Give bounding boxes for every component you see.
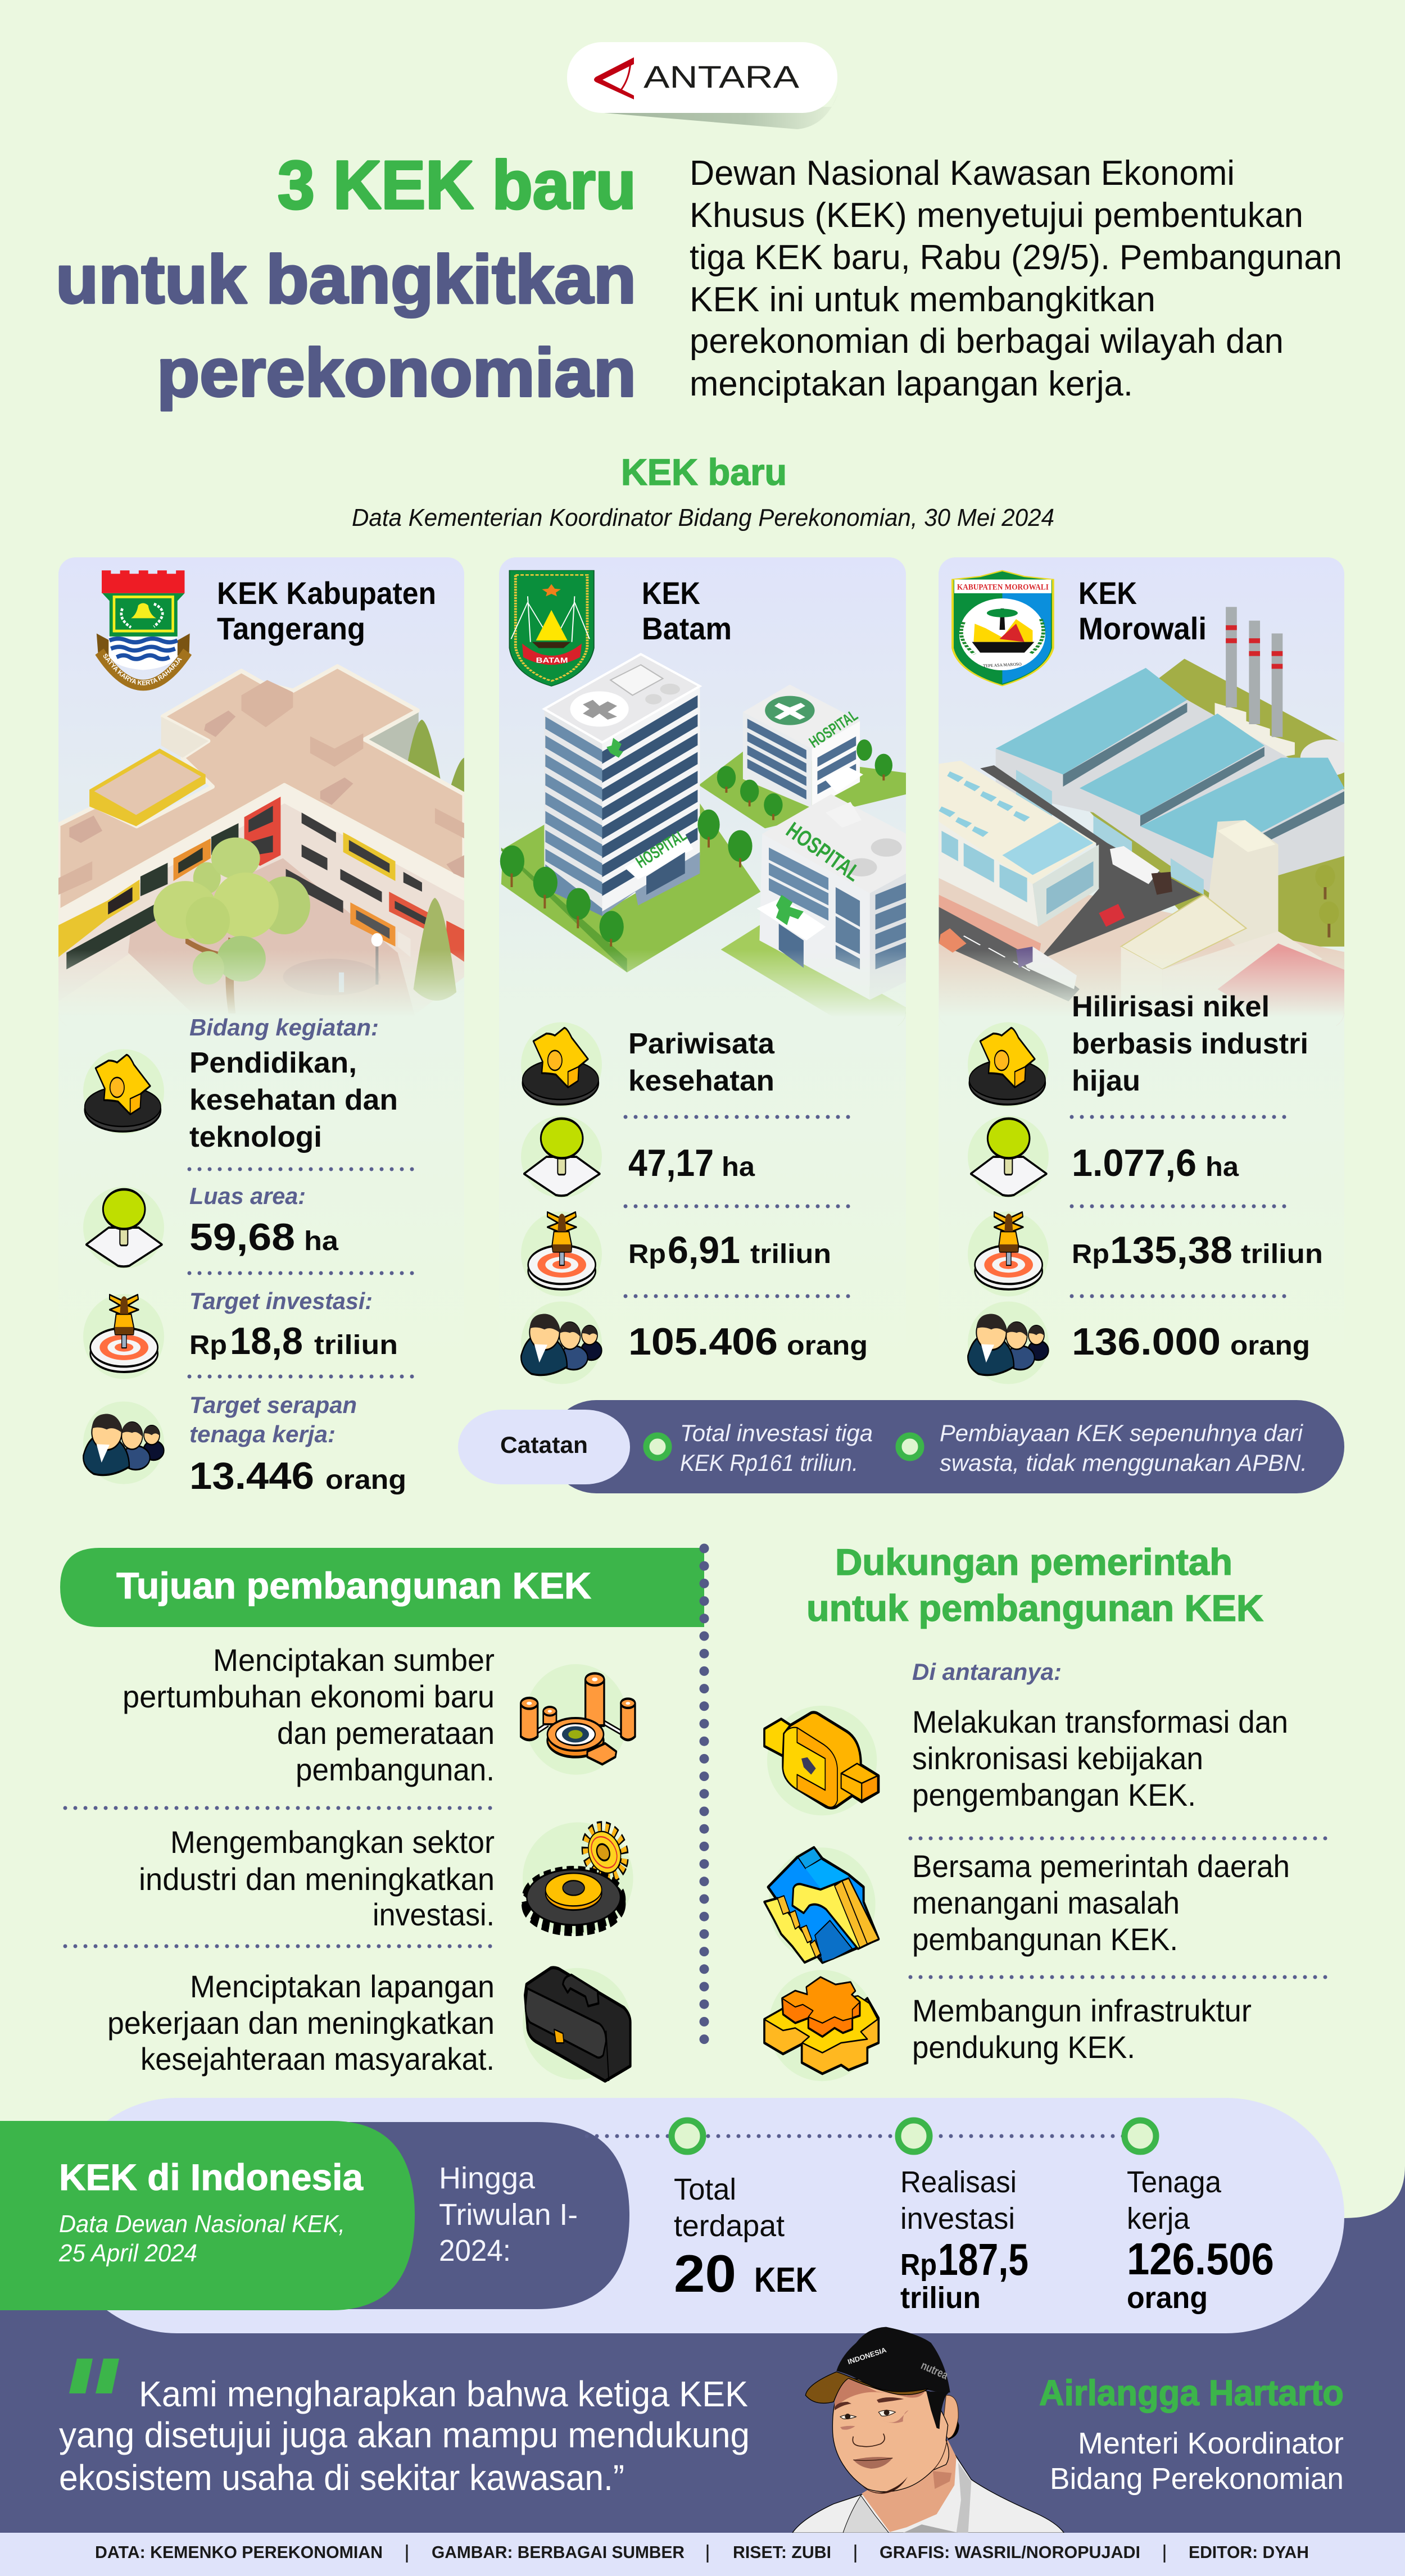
icon: bidang kegiatan	[521, 1022, 602, 1107]
label: di antaranya: Di antaranya:	[912, 1659, 1062, 1685]
text: luas area: ha	[722, 1152, 755, 1182]
quote	[59, 2359, 750, 2498]
marker and stat: realisasi investasi	[898, 2120, 1028, 2315]
icon: luas area	[83, 1187, 164, 1269]
intro text: KEK ini untuk membangkitkan	[690, 280, 1155, 319]
text: target investasi: Rp	[1072, 1239, 1109, 1269]
quote attribution: Menteri Koordinator	[1078, 2427, 1344, 2460]
panel: KEK Kabupaten Tangerang	[58, 557, 464, 1497]
text: target investasi: triliun	[314, 1330, 398, 1360]
text: tujuan 2	[139, 1824, 495, 1932]
icon: target investasi	[83, 1294, 164, 1379]
text: target serapan tenaga kerja: tenaga kerja:	[189, 1421, 336, 1447]
callout: catatan	[458, 1400, 1344, 1493]
marker and stat: tenaga kerja: 126.506	[1127, 2234, 1274, 2284]
icon: luas area	[521, 1116, 602, 1198]
text: tujuan 2: investasi.	[373, 1897, 495, 1932]
label: hingga triwulan: Hingga	[439, 2161, 536, 2195]
panel: KEK Morowali	[939, 557, 1356, 1400]
marker and stat: realisasi investasi: triliun	[900, 2281, 981, 2315]
logo: Kabupaten Tangerang: SATYA KARYA KERTA RAHARJA	[103, 654, 182, 685]
text: tenaga kerja: orang	[787, 1331, 868, 1361]
footer credits	[0, 2533, 1405, 2576]
marker and stat: total KEK: Total	[674, 2173, 736, 2206]
text: dukungan 2: Bersama pemerintah daerah	[912, 1848, 1290, 1884]
title: perekonomian	[157, 334, 636, 411]
text: luas area	[189, 1183, 338, 1259]
text: tujuan 1: pertumbuhan ekonomi baru	[123, 1679, 495, 1714]
quote attribution: Bidang Perekonomian	[1050, 2462, 1344, 2496]
callout: catatan: Catatan	[500, 1432, 588, 1458]
heading: KEK di Indonesia: 25 April 2024	[58, 2239, 197, 2267]
text: tujuan 3: kesejahteraan masyarakat.	[140, 2041, 495, 2077]
text: target serapan tenaga kerja	[189, 1392, 406, 1497]
footer credits: RISET: ZUBI	[733, 2542, 831, 2562]
quote: Kami mengharapkan bahwa ketiga KEK	[139, 2374, 748, 2414]
text: bidang kegiatan: Pariwisata	[628, 1028, 775, 1060]
heading: dukungan	[806, 1541, 1263, 1629]
heading: Tangerang	[217, 611, 365, 646]
marker and stat: tenaga kerja: kerja	[1127, 2202, 1190, 2236]
logo: Kota Batam: BATAM	[536, 657, 568, 665]
text: tujuan 1: pembangunan.	[296, 1752, 495, 1787]
text: bidang kegiatan: kesehatan dan	[189, 1084, 398, 1116]
icon: luas area	[968, 1116, 1049, 1198]
text: tenaga kerja: 136.000	[1072, 1320, 1221, 1363]
text: luas area: 59,68	[189, 1216, 295, 1259]
text: tujuan 2: Mengembangkan sektor	[170, 1824, 495, 1860]
icon: tenaga kerja	[521, 1301, 602, 1384]
text: luas area: ha	[1205, 1152, 1239, 1182]
heading: Batam	[642, 611, 732, 646]
text: tujuan 3	[107, 1969, 495, 2077]
label: hingga triwulan: Triwulan I-	[439, 2198, 578, 2232]
text: luas area: ha	[304, 1226, 338, 1256]
illustration: hospital	[499, 654, 907, 1029]
text: target serapan tenaga kerja: Target serapan	[189, 1392, 357, 1418]
text: bidang kegiatan	[628, 1028, 775, 1097]
icon: briefcase	[523, 1968, 631, 2081]
marker and stat: tenaga kerja: orang	[1127, 2281, 1208, 2315]
icon: bidang kegiatan	[968, 1022, 1049, 1107]
text: dukungan 1: sinkronisasi kebijakan	[912, 1741, 1203, 1776]
text: bidang kegiatan: berbasis industri	[1072, 1028, 1308, 1060]
icon: key block	[764, 1706, 878, 1815]
text: luas area: Luas area:	[189, 1183, 306, 1209]
text: tujuan 1	[123, 1642, 495, 1787]
illustration: school building	[58, 666, 464, 1029]
heading: tujuan	[60, 1548, 704, 1627]
intro text: Khusus (KEK) menyetujui pembentukan	[690, 196, 1303, 235]
panel: dukungan pemerintah	[764, 1541, 1335, 2081]
marker and stat: realisasi investasi: 187,5	[938, 2234, 1028, 2284]
marker and stat: total KEK: KEK	[754, 2261, 817, 2300]
text: dukungan 2: pembangunan KEK.	[912, 1921, 1178, 1957]
text: tenaga kerja	[1072, 1320, 1310, 1363]
logo: Kabupaten Tangerang	[96, 570, 192, 691]
icon: machine	[521, 1664, 635, 1775]
text: tujuan 1: Menciptakan sumber	[213, 1642, 495, 1678]
text: target investasi: triliun	[1241, 1239, 1323, 1269]
text: dukungan 1	[912, 1704, 1288, 1812]
marker and stat: realisasi investasi: Rp	[900, 2248, 937, 2282]
icon: bidang kegiatan	[83, 1049, 164, 1134]
label: hingga triwulan: 2024:	[439, 2234, 511, 2268]
heading	[217, 575, 436, 646]
heading: KEK Kabupaten	[217, 575, 436, 611]
section heading: KEK baru	[352, 451, 1054, 531]
text: target investasi: 18,8	[230, 1320, 303, 1362]
logo: Kabupaten Morowali: TEPE ASA MAROSO	[983, 662, 1022, 669]
illustration: hospital: HOSPITAL	[806, 706, 861, 751]
footer credits: EDITOR: DYAH	[1189, 2542, 1309, 2562]
callout: catatan: Pembiayaan KEK sepenuhnya dari	[940, 1420, 1304, 1446]
panel: KEK di Indonesia	[0, 2098, 1344, 2333]
icon: tenaga kerja	[83, 1401, 164, 1484]
panel: tujuan pembangunan KEK	[60, 1548, 704, 2081]
heading: KEK	[1078, 575, 1137, 611]
logo: ANTARA: ANTARA	[643, 59, 800, 94]
heading: tujuan: Tujuan pembangunan KEK	[116, 1565, 591, 1606]
heading: Morowali	[1078, 611, 1207, 646]
text: target serapan tenaga kerja: orang	[325, 1465, 406, 1495]
text: tenaga kerja	[628, 1320, 868, 1363]
heading: dukungan: untuk pembangunan KEK	[806, 1587, 1263, 1629]
text: target investasi	[628, 1229, 831, 1271]
text: target investasi: triliun	[750, 1239, 831, 1269]
text: target investasi: Target investasi:	[189, 1288, 373, 1314]
text: dukungan 2: menangani masalah	[912, 1885, 1180, 1920]
callout: catatan: Total investasi tiga	[680, 1420, 873, 1446]
heading	[1078, 575, 1207, 646]
icon: handshake	[764, 1847, 878, 1962]
text: target investasi	[189, 1288, 398, 1362]
text: dukungan 3: pendukung KEK.	[912, 2029, 1135, 2065]
text: tujuan 3: pekerjaan dan meningkatkan	[107, 2005, 495, 2041]
marker and stat: total KEK	[672, 2120, 817, 2303]
heading: KEK di Indonesia: KEK di Indonesia	[59, 2156, 364, 2198]
text: tujuan 1: dan pemerataan	[277, 1715, 495, 1751]
logo: Kabupaten Morowali	[953, 571, 1053, 685]
quote: ekosistem usaha di sekitar kawasan.”	[59, 2457, 624, 2498]
text: tenaga kerja: 105.406	[628, 1320, 778, 1363]
panel: KEK Batam	[499, 557, 907, 1400]
title	[56, 147, 636, 411]
text: dukungan 3	[912, 1993, 1252, 2065]
portrait: Airlangga Hartarto	[792, 2327, 1064, 2533]
callout: catatan: swasta, tidak menggunakan APBN.	[940, 1450, 1307, 1476]
illustration: hospital: HOSPITAL	[633, 826, 690, 872]
text: dukungan 2	[912, 1848, 1290, 1957]
text: target investasi: 6,91	[668, 1229, 740, 1271]
heading	[642, 575, 732, 646]
intro text: Dewan Nasional Kawasan Ekonomi	[690, 154, 1235, 193]
text: tujuan 2: industri dan meningkatkan	[139, 1861, 495, 1897]
text: dukungan 3: Membangun infrastruktur	[912, 1993, 1252, 2028]
marker and stat: realisasi investasi: Realisasi	[900, 2165, 1017, 2199]
text: luas area: 1.077,6	[1072, 1142, 1196, 1184]
marker and stat: realisasi investasi: investasi	[900, 2202, 1015, 2236]
intro text: menciptakan lapangan kerja.	[690, 365, 1133, 403]
icon: quote marks	[69, 2359, 119, 2393]
text: tenaga kerja: orang	[1230, 1331, 1310, 1361]
marker and stat: total KEK: 20	[674, 2244, 736, 2303]
logo: Kota Batam	[510, 570, 594, 686]
section heading: KEK baru: Data Kementerian Koordinator Bidang Perekonomian, 30 Mei 2024	[352, 504, 1054, 531]
text: tujuan 3: Menciptakan lapangan	[190, 1969, 495, 2004]
quote attribution: Airlangga Hartarto	[1039, 2373, 1344, 2413]
marker and stat: total KEK: terdapat	[674, 2209, 785, 2243]
marker and stat: tenaga kerja: Tenaga	[1127, 2165, 1222, 2199]
text: bidang kegiatan: hijau	[1072, 1065, 1140, 1097]
divider: dotted vertical	[699, 1548, 709, 2040]
callout: catatan: KEK Rp161 triliun.	[680, 1450, 858, 1476]
illustration: hospital: HOSPITAL	[782, 817, 865, 886]
heading: dukungan: Dukungan pemerintah	[835, 1541, 1232, 1583]
logo: ANTARA	[567, 42, 839, 129]
text: target investasi	[1072, 1229, 1323, 1271]
text: bidang kegiatan	[1072, 991, 1308, 1097]
label: hingga triwulan	[281, 2122, 629, 2309]
icon: tenaga kerja	[968, 1301, 1049, 1384]
title: 3 KEK baru	[278, 147, 636, 223]
quote: yang disetujui juga akan mampu mendukung	[59, 2415, 750, 2455]
heading: KEK	[642, 575, 700, 611]
text: luas area: 47,17	[628, 1142, 714, 1184]
intro text: tiga KEK baru, Rabu (29/5). Pembangunan	[690, 238, 1342, 277]
icon: puzzle	[764, 1970, 878, 2081]
intro text	[690, 154, 1342, 403]
heading: KEK di Indonesia: Data Dewan Nasional KEK,	[59, 2210, 345, 2238]
text: dukungan 1: pengembangan KEK.	[912, 1777, 1196, 1812]
portrait: Airlangga Hartarto: nutrea	[919, 2359, 950, 2382]
text: bidang kegiatan: kesehatan	[628, 1065, 774, 1097]
text: dukungan 1: Melakukan transformasi dan	[912, 1704, 1288, 1739]
icon: gears	[523, 1818, 633, 1934]
heading: KEK di Indonesia	[0, 2121, 415, 2310]
intro text: perekonomian di berbagai wilayah dan	[690, 322, 1284, 361]
text: bidang kegiatan: teknologi	[189, 1121, 322, 1153]
text: bidang kegiatan: Bidang kegiatan:	[189, 1014, 379, 1041]
footer credits: GRAFIS: WASRIL/NOROPUJADI	[880, 2542, 1140, 2562]
title: untuk bangkitkan	[56, 241, 636, 317]
logo: Kabupaten Morowali: KABUPATEN MOROWALI	[957, 582, 1049, 592]
text: target investasi: Rp	[189, 1330, 227, 1360]
text: target investasi: 135,38	[1110, 1229, 1232, 1271]
text: bidang kegiatan: Hilirisasi nikel	[1072, 991, 1270, 1023]
text: bidang kegiatan	[189, 1014, 398, 1153]
footer credits: GAMBAR: BERBAGAI SUMBER	[432, 2542, 685, 2562]
footer credits: DATA: KEMENKO PEREKONOMIAN	[95, 2542, 383, 2562]
icon: target investasi	[968, 1211, 1049, 1297]
text: target investasi: Rp	[628, 1239, 666, 1269]
icon: target investasi	[521, 1211, 602, 1297]
text: target serapan tenaga kerja: 13.446	[189, 1455, 314, 1497]
portrait: Airlangga Hartarto: INDONESIA	[847, 2346, 887, 2366]
section heading: KEK baru: KEK baru	[621, 451, 787, 493]
text: bidang kegiatan: Pendidikan,	[189, 1047, 357, 1079]
illustration: factory	[939, 607, 1356, 1029]
marker and stat: tenaga kerja	[1125, 2120, 1274, 2315]
quote attribution	[1039, 2373, 1344, 2496]
